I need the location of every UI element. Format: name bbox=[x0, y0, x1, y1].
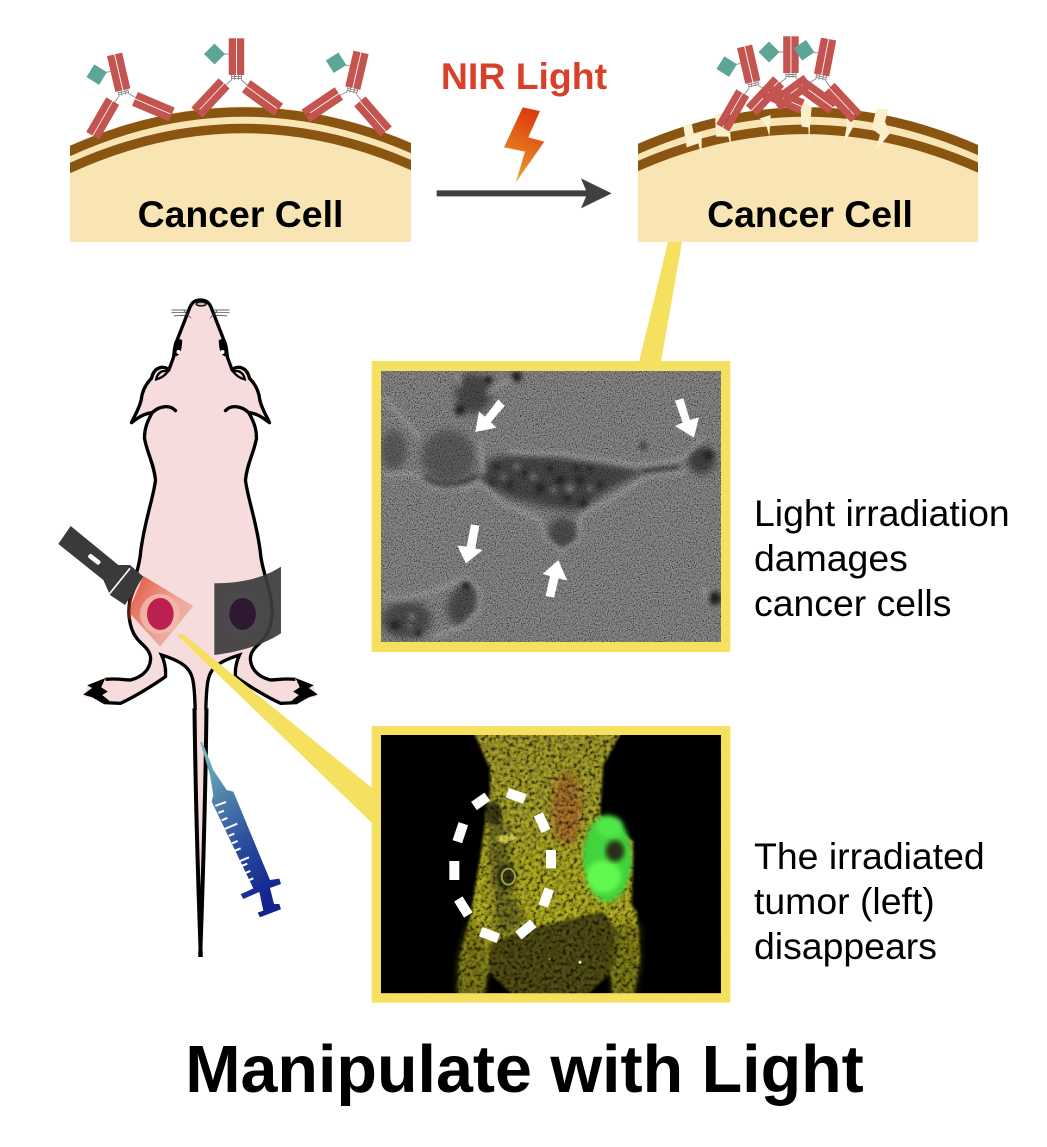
caption: light irradiation: cancer cells bbox=[754, 582, 951, 624]
caption: light irradiation: damages bbox=[754, 537, 908, 579]
heading: NIR light: NIR Light bbox=[441, 55, 607, 97]
damaged cell body bbox=[623, 107, 993, 242]
panel: cancer cell before light bbox=[55, 38, 426, 242]
cell body bbox=[55, 106, 426, 242]
icon: flashlight bbox=[58, 526, 143, 605]
yellow callout wedge to fluorescence image bbox=[178, 634, 372, 823]
panel: fluorescence image of mouse bbox=[372, 726, 730, 1003]
dashed white circle around treated tumor bbox=[454, 793, 551, 938]
mottled texture bbox=[381, 735, 721, 993]
caption: tumor disappears: tumor (left) bbox=[754, 880, 935, 922]
panel: micrograph of damaged cells bbox=[372, 361, 730, 652]
caption: tumor disappears: disappears bbox=[754, 925, 937, 967]
white arrows marking damaged cells bbox=[457, 398, 699, 598]
light shield over right tumor bbox=[214, 567, 281, 655]
antibodies with dye bbox=[71, 38, 406, 142]
illustration: mouse with treatment bbox=[58, 300, 318, 957]
light beam on left tumor bbox=[128, 576, 193, 647]
clustered antibodies bbox=[701, 30, 874, 134]
caption: tumor disappears: The irradiated bbox=[754, 835, 985, 877]
image grain bbox=[381, 371, 721, 642]
mouse body bbox=[83, 300, 318, 957]
membrane damage bolts bbox=[683, 98, 890, 157]
icon: syringe bbox=[200, 742, 281, 917]
label: cancer cell: Cancer Cell bbox=[138, 193, 343, 235]
yellow callout wedge to micrograph bbox=[639, 242, 682, 362]
icon: lightning bolt bbox=[504, 107, 544, 183]
mouse body fluorescence bbox=[458, 732, 640, 995]
title: Manipulate with Light bbox=[185, 1033, 864, 1107]
panel: cancer cell after light bbox=[623, 30, 993, 362]
caption: light irradiation: Light irradiation bbox=[754, 492, 1010, 534]
micrograph cell structures bbox=[380, 371, 722, 638]
glowing untreated tumor bbox=[583, 815, 631, 902]
label: cancer cell: Cancer Cell bbox=[707, 193, 913, 235]
arrow: process direction bbox=[437, 178, 612, 208]
